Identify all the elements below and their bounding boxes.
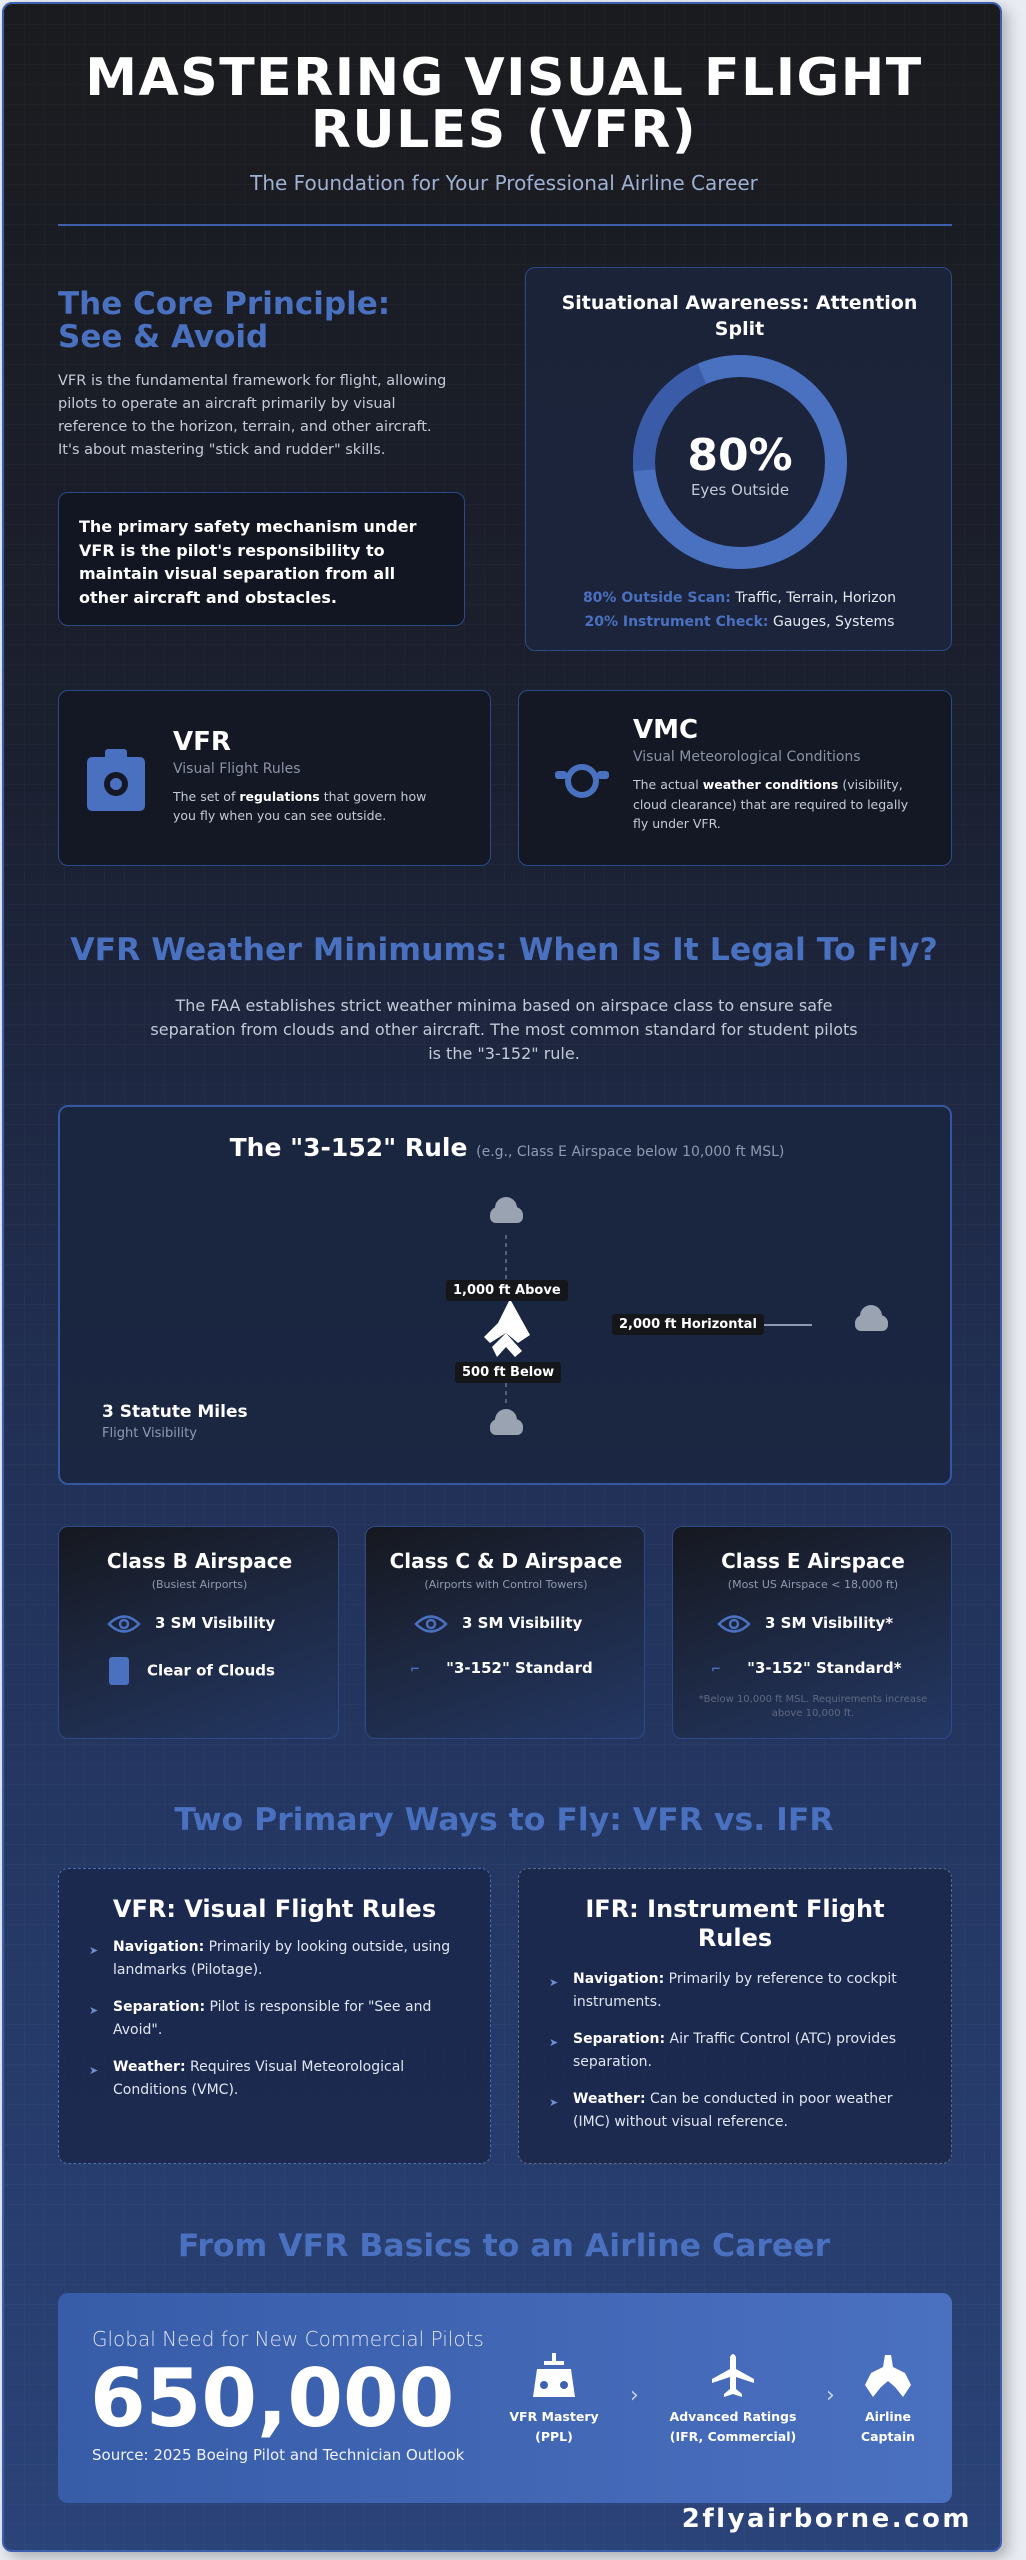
callout: safety mechanism <box>58 492 465 626</box>
panel: Class C & D <box>365 1526 645 1739</box>
row: visibility <box>717 1614 893 1633</box>
step: airline captain: Captain <box>861 2429 915 2444</box>
panel: career stats <box>58 2293 952 2503</box>
label: 1000 ft above: 1,000 ft Above <box>453 1283 561 1298</box>
subtitle: The Foundation for Your Professional Airline Career <box>250 171 758 195</box>
step: airline captain <box>861 2355 915 2444</box>
text: VMC: VMC <box>633 715 698 745</box>
diagram title: The "3-152" Rule (e.g., Class E Airspace below 10,000 ft MSL) <box>230 1133 784 1162</box>
label: visibility <box>102 1402 248 1441</box>
panel: IFR rules: Weather: Can be conducted in poor weather (IMC) without visual reference. <box>573 2091 892 2130</box>
row: visibility <box>414 1614 582 1633</box>
step: advanced ratings: Advanced Ratings <box>670 2409 796 2424</box>
row: clear of clouds: Clear of Clouds <box>147 1662 275 1680</box>
panel: 3-152 rule diagram <box>58 1105 952 1485</box>
panel: VFR rules: VFR: Visual Flight Rules <box>113 1895 436 1923</box>
panel: VFR rules <box>58 1868 491 2164</box>
chart title <box>562 292 917 340</box>
row: visibility: 3 SM Visibility* <box>765 1614 893 1632</box>
donut chart: 80% <box>687 430 793 481</box>
text: VFR: Visual Flight Rules <box>173 761 301 777</box>
panel: Class C & D: (Airports with Control Towers) <box>424 1578 588 1591</box>
panel: VMC definition <box>518 690 952 866</box>
text: VFR: VFR <box>173 727 231 757</box>
legend <box>583 590 896 630</box>
footnote: *Below 10,000 ft MSL. Requirements increase above 10,000 ft. <box>699 1694 927 1719</box>
panel: Class E: (Most US Airspace < 18,000 ft) <box>728 1578 898 1591</box>
row: clear of clouds <box>109 1657 275 1685</box>
step: VFR mastery: (PPL) <box>535 2429 573 2444</box>
row: visibility <box>107 1614 275 1633</box>
label: 2000 ft horizontal: 2,000 ft Horizontal <box>619 1317 757 1332</box>
panel: Class B: (Busiest Airports) <box>152 1578 247 1591</box>
chart title: Split <box>715 318 764 340</box>
heading: career: From VFR Basics to an Airline Career <box>178 2228 830 2264</box>
arrow: › <box>630 2383 639 2408</box>
text: weather minimums intro: is the "3-152" rule. <box>428 1044 580 1063</box>
panel: Class B <box>58 1526 339 1739</box>
title <box>85 48 923 160</box>
text: weather minimums intro <box>150 996 858 1063</box>
text: VMC <box>632 715 908 831</box>
text: VFR: The set of regulations that govern how <box>173 789 426 804</box>
step: VFR mastery: VFR Mastery <box>509 2409 599 2424</box>
panel: VFR rules: Navigation: Primarily by looking outside, using landmarks (Pilotage). <box>113 1939 450 1978</box>
footer: website: 2flyairborne.com <box>682 2504 972 2534</box>
panel: Class E: Class E Airspace <box>721 1549 905 1573</box>
panel: Class B: Class B Airspace <box>107 1549 292 1573</box>
text: core principle paragraph: VFR is the fundamental framework for flight, allowing pilots to operate an aircraft primarily by visual reference to the horizon, terrain, and other aircraft. It's about mastering "stick and rudder" skills. <box>58 373 446 458</box>
heading: weather minimums: VFR Weather Minimums: When Is It Legal To Fly? <box>70 932 938 968</box>
panel: IFR rules: IFR: Instrument Flight <box>585 1895 885 1923</box>
text: VMC: The actual weather conditions (visibility, cloud clearance) that are required to legally fly under VFR. <box>633 777 908 831</box>
label: 500 ft below <box>455 1362 561 1383</box>
step: advanced ratings <box>670 2354 796 2444</box>
panel: Class C & D: Class C & D Airspace <box>390 1549 622 1573</box>
label: 2000 ft horizontal <box>612 1314 764 1335</box>
label: visibility: 3 Statute Miles <box>102 1402 248 1422</box>
heading: VFR vs IFR: Two Primary Ways to Fly: VFR vs. IFR <box>174 1802 834 1838</box>
panel: Class E <box>672 1526 952 1739</box>
text: VMC: Visual Meteorological Conditions <box>633 749 861 765</box>
panel: VFR rules: Weather: Requires Visual Meteorological Conditions (VMC). <box>113 2059 404 2098</box>
source: Source: 2025 Boeing Pilot and Technician Outlook <box>92 2446 464 2464</box>
title: MASTERING VISUAL FLIGHT <box>85 48 923 108</box>
panel: IFR rules: Separation: Air Traffic Control (ATC) provides separation. <box>573 2031 896 2070</box>
callout: safety mechanism: The primary safety mechanism under VFR is the pilot's responsibility to maintain visual separation from all other aircraft and obstacles. <box>79 517 417 606</box>
row: 3-152: ⌐ "3-152" Standard* <box>711 1659 902 1677</box>
icon: airplane <box>484 1299 530 1357</box>
step: advanced ratings: (IFR, Commercial) <box>670 2429 796 2444</box>
label: visibility: Flight Visibility <box>102 1426 197 1441</box>
panel: IFR rules: Navigation: Primarily by reference to cockpit instruments. <box>573 1971 897 2010</box>
icon: cloud above <box>490 1197 523 1223</box>
panel: VFR definition <box>58 690 491 866</box>
label: 1000 ft above <box>446 1280 568 1301</box>
label: 500 ft below: 500 ft Below <box>462 1365 554 1380</box>
stat number: 650,000 <box>90 2352 454 2445</box>
title: RULES (VFR) <box>311 100 697 160</box>
chart title: Situational Awareness: Attention <box>562 292 917 314</box>
step: airline captain: Airline <box>865 2409 911 2424</box>
stat label: Global Need for New Commercial Pilots <box>92 2327 484 2351</box>
row: 3-152: ⌐ "3-152" Standard <box>410 1659 593 1677</box>
row: visibility: 3 SM Visibility <box>155 1614 275 1632</box>
text: weather minimums intro: separation from clouds and other aircraft. The most common standard for student pilots <box>150 1020 858 1039</box>
heading: core principle: The Core Principle: <box>58 286 390 322</box>
icon: camera <box>87 749 145 811</box>
panel: VFR rules: Separation: Pilot is responsible for "See and Avoid". <box>113 1999 431 2038</box>
text: weather minimums intro: The FAA establishes strict weather minima based on airspace class to ensure safe <box>175 996 833 1015</box>
heading: core principle: See & Avoid <box>58 319 268 355</box>
text: VFR: you fly when you can see outside. <box>173 808 386 823</box>
text: VFR <box>172 727 426 823</box>
icon: VMC ring <box>555 764 609 798</box>
donut chart <box>633 355 847 569</box>
icon: cloud right <box>855 1305 888 1331</box>
row: visibility: 3 SM Visibility <box>462 1614 582 1632</box>
heading: core principle <box>58 286 390 355</box>
legend: 80% Outside Scan: Traffic, Terrain, Horizon <box>583 590 896 606</box>
arrow: › <box>826 2383 835 2408</box>
step: VFR mastery <box>509 2353 599 2444</box>
panel: IFR rules <box>518 1868 952 2164</box>
donut chart: Eyes Outside <box>691 481 789 499</box>
panel: attention split <box>525 267 952 651</box>
icon: cloud below <box>490 1409 523 1435</box>
panel: IFR rules: Rules <box>698 1924 772 1952</box>
legend: 20% Instrument Check: Gauges, Systems <box>584 614 894 630</box>
